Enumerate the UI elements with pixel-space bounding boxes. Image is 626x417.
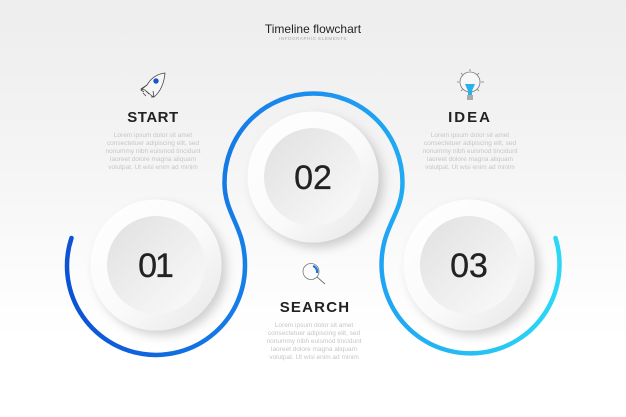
- text: search body: nonummy nibh euismod tincidunt: [266, 338, 362, 345]
- heading: search: SEARCH: [280, 299, 350, 316]
- text: search body: Lorem ipsum dolor sit amet: [275, 322, 353, 329]
- step 01 disc: 01: [138, 247, 173, 285]
- step 02 disc: [248, 112, 378, 242]
- text: search body: volutpat. Ut wisi enim ad minim: [269, 354, 359, 361]
- text: idea body: consectetuer adipiscing elit, sed: [424, 140, 516, 147]
- text: idea body: laoreet dolore magna aliquam: [427, 156, 513, 163]
- text: idea body: nonummy nibh euismod tincidunt: [422, 148, 518, 155]
- step 03 disc: [404, 200, 534, 330]
- text: search body: consectetuer adipiscing elit, sed: [268, 330, 360, 337]
- heading: start: START: [127, 109, 179, 126]
- text: start body: [105, 132, 201, 171]
- subtitle: INFOGRAPHIC ELEMENTS: [279, 36, 347, 41]
- step 03 disc: 03: [450, 247, 488, 285]
- text: search body: laoreet dolore magna aliquam: [271, 346, 357, 353]
- title: Timeline flowchart: [265, 22, 361, 36]
- text: start body: Lorem ipsum dolor sit amet: [114, 132, 192, 139]
- timeline curve: [67, 94, 559, 355]
- text: start body: consectetuer adipiscing elit, sed: [107, 140, 199, 147]
- text: search body: [266, 322, 362, 361]
- step 01 disc: [90, 200, 222, 330]
- icon: light bulb: [457, 69, 484, 100]
- icon: magnifier: [303, 264, 325, 284]
- text: idea body: volutpat. Ut wisi enim ad minim: [425, 164, 515, 171]
- text: idea body: [422, 132, 518, 171]
- text: start body: laoreet dolore magna aliquam: [110, 156, 196, 163]
- icon: rocket: [141, 73, 165, 97]
- step 02 disc: 02: [294, 159, 332, 197]
- text: idea body: Lorem ipsum dolor sit amet: [431, 132, 509, 139]
- text: start body: volutpat. Ut wisi enim ad minim: [108, 164, 198, 171]
- text: start body: nonummy nibh euismod tincidunt: [105, 148, 201, 155]
- heading: idea: IDEA: [448, 109, 492, 126]
